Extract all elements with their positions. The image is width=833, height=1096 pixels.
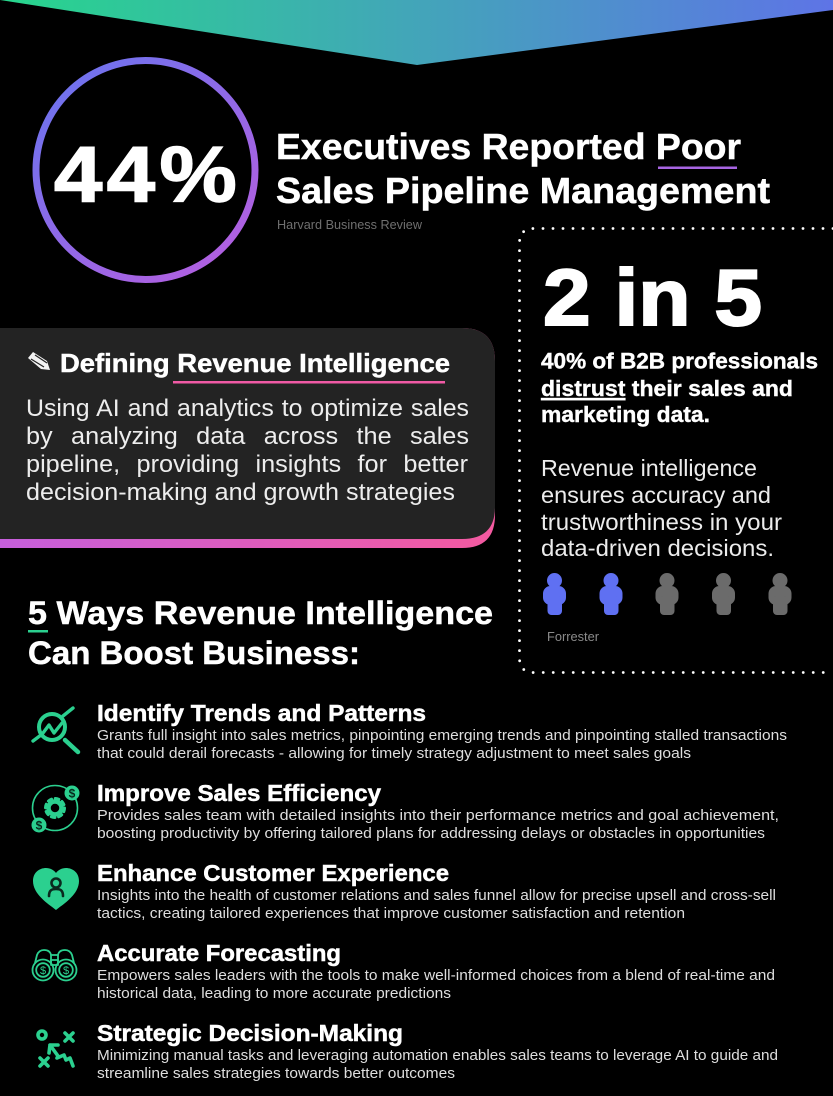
panel: 2 in 5 statistic: 40% of B2B professionals [541,348,818,374]
source: Harvard Business Review: Harvard Business Review [277,218,423,232]
item: Identify Trends and Patterns [33,700,787,762]
icon: magnifier with trend [33,708,78,752]
icon: gear with coins: $ [69,786,76,800]
item: Identify Trends and Patterns: Identify Trends and Patterns [97,700,426,726]
item: Strategic Decision-Making: Strategic Decision-Making [97,1020,403,1046]
item: Strategic Decision-Making: streamline sales strategies towards better outcomes [97,1066,455,1082]
panel: 2 in 5 statistic [520,228,833,672]
headline [276,126,770,211]
icon: strategy play arrow [38,1031,73,1066]
panel: 2 in 5 statistic: trustworthiness in your [541,509,782,535]
icon: gear with coins: $ [36,818,43,832]
item: Enhance Customer Experience: Insights into the health of customer relations and sales funnel allow for precise upsell and cross-sell [97,888,776,904]
icon: binoculars with dollar lenses: $ [63,965,69,977]
panel: 2 in 5 statistic: Revenue intelligence [541,455,757,481]
item: Identify Trends and Patterns: that could derail forecasts - allowing for timely strategy adjustment to meet sales goals [97,746,691,762]
headline: Executives Reported Poor [276,126,741,167]
icon: pencil [28,352,50,370]
item: Strategic Decision-Making [38,1020,778,1082]
panel: Defining Revenue Intelligence [0,328,495,548]
item: Accurate Forecasting: historical data, leading to more accurate predictions [97,986,451,1002]
item: Improve Sales Efficiency: Improve Sales Efficiency [97,780,381,806]
panel: 2 in 5 statistic: distrust their sales and [541,376,793,401]
panel: Defining Revenue Intelligence: Using AI and analytics to optimize sales [26,395,469,422]
panel: Defining Revenue Intelligence: Defining Revenue Intelligence [60,348,450,378]
item: Improve Sales Efficiency: Provides sales team with detailed insights into their performance metrics and goal achievement, [97,808,779,824]
panel: Defining Revenue Intelligence: decision-making and growth strategies [26,479,455,506]
item: Enhance Customer Experience [33,860,776,922]
panel: 2 in 5 statistic: ensures accuracy and [541,482,771,508]
item: Improve Sales Efficiency [32,780,779,842]
icon: binoculars with dollar lenses: $ [40,965,46,977]
item: Accurate Forecasting [32,940,775,1002]
icon: heart with person [33,868,79,910]
item: Identify Trends and Patterns: Grants full insight into sales metrics, pinpointing emerging trends and pinpointing stalled transactions [97,728,787,744]
panel: Defining Revenue Intelligence: by analyzing data across the sales [26,423,469,450]
icon: people, 2 of 5 highlighted [543,573,792,615]
stat ring: 44%: 44% [54,130,241,219]
heading: 5 Ways [28,595,493,671]
heading: 5 Ways: Can Boost Business: [28,635,360,671]
panel: 2 in 5 statistic: data-driven decisions. [541,535,774,561]
icon: binoculars with dollar lenses [32,950,76,980]
item: Improve Sales Efficiency: boosting productivity by offering tailored plans for addressing delays or obstacles in opportunities [97,826,765,842]
item: Strategic Decision-Making: Minimizing manual tasks and leveraging automation enables sales teams to leverage AI to guide and [97,1048,778,1064]
top gradient banner [0,0,833,65]
source: Forrester: Forrester [547,630,599,644]
item: Accurate Forecasting: Empowers sales leaders with the tools to make well-informed choices from a blend of real-time and [97,968,775,984]
panel: 2 in 5 statistic: marketing data. [541,402,710,427]
item: Accurate Forecasting: Accurate Forecasting [97,940,341,966]
panel: 2 in 5 statistic: 2 in 5 [543,253,762,342]
panel: Defining Revenue Intelligence: pipeline, providing insights for better [26,451,468,478]
heading: 5 Ways: 5 Ways Revenue Intelligence [28,595,493,631]
stat ring: 44% [36,60,255,280]
headline: Sales Pipeline Management [276,170,770,211]
item: Enhance Customer Experience: Enhance Customer Experience [97,860,449,886]
icon: gear with coins [32,786,80,832]
item: Enhance Customer Experience: tactics, creating tailored experiences that improve customer satisfaction and retention [97,906,685,922]
